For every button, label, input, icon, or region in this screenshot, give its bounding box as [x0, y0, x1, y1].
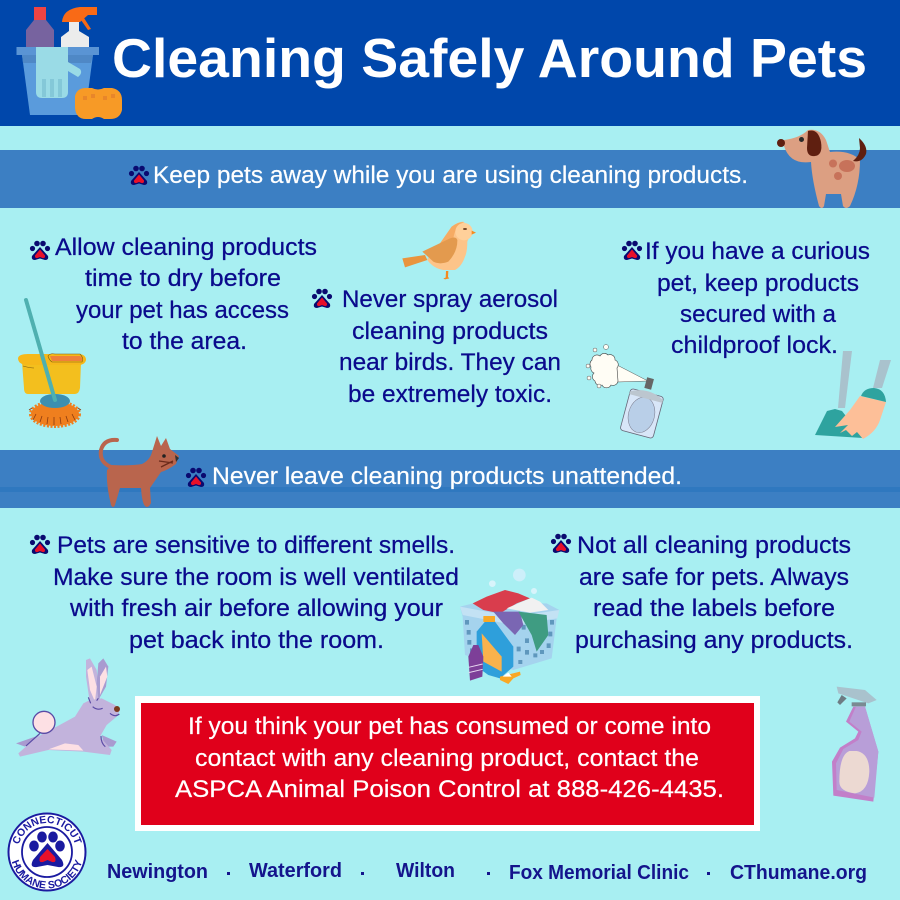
band: never leave unattended — [0, 450, 900, 508]
icon: paw — [551, 534, 571, 553]
text: curious pet: If you have a curious — [645, 238, 870, 265]
footer locations — [107, 860, 867, 884]
footer locations: Waterford — [249, 860, 342, 882]
text: read labels: are safe for pets. Always — [579, 564, 849, 591]
band: keep pets away — [0, 150, 900, 208]
icon: paw — [186, 468, 206, 487]
footer locations: Wilton — [396, 860, 455, 882]
icon: rabbit — [16, 658, 120, 757]
text: smells: Pets are sensitive to different smells. — [57, 532, 455, 559]
header banner — [0, 0, 900, 126]
logo: Connecticut Humane Society — [8, 812, 86, 892]
callout: poison control — [135, 696, 760, 831]
text: aerosol: cleaning products — [352, 318, 548, 345]
icon: bird — [402, 222, 476, 279]
band: never leave unattended: Never leave cleaning products unattended. — [212, 463, 682, 490]
icon: laundry basket — [460, 569, 559, 684]
text: read labels — [575, 532, 853, 654]
text: dry time: time to dry before — [85, 265, 281, 292]
text: smells: pet back into the room. — [129, 627, 384, 654]
icon: paw — [30, 241, 50, 260]
icon: paw — [30, 535, 50, 554]
footer locations: Fox Memorial Clinic — [509, 862, 689, 884]
callout: poison control: contact with any cleaning product, contact the — [195, 745, 699, 772]
callout: poison control: If you think your pet has consumed or come into — [188, 713, 711, 740]
icon: paw — [129, 166, 149, 185]
icon: paw — [312, 289, 332, 308]
text: aerosol — [339, 286, 561, 408]
band: keep pets away: Keep pets away while you are using cleaning products. — [153, 162, 748, 189]
icon: aerosol can spraying — [586, 344, 664, 439]
text: read labels: Not all cleaning products — [577, 532, 851, 559]
icon: broom and dustpan — [815, 351, 891, 439]
text: read labels: purchasing any products. — [575, 627, 853, 654]
footer locations: Newington — [107, 861, 208, 883]
icon: mop and bucket — [18, 300, 86, 426]
text: dry time — [55, 234, 317, 355]
text: curious pet — [645, 238, 870, 359]
text: aerosol: Never spray aerosol — [342, 286, 558, 313]
icon: dog — [777, 130, 866, 208]
text: curious pet: childproof lock. — [671, 332, 838, 359]
title: Cleaning Safely Around Pets — [112, 27, 867, 89]
footer locations: CThumane.org — [730, 862, 867, 884]
text: smells — [53, 532, 459, 654]
callout: poison control: ASPCA Animal Poison Control at 888-426-4435. — [175, 776, 724, 803]
text: aerosol: be extremely toxic. — [348, 381, 552, 408]
text: read labels: read the labels before — [593, 595, 835, 622]
icon: spray bottle — [832, 687, 878, 802]
icon: cat — [101, 436, 179, 507]
text: curious pet: secured with a — [680, 301, 837, 328]
logo: Connecticut Humane Society: CONNECTICUT — [12, 816, 82, 844]
logo: Connecticut Humane Society: HUMANE SOCIETY — [12, 859, 82, 888]
text: smells: with fresh air before allowing your — [69, 595, 443, 622]
text: smells: Make sure the room is well ventilated — [53, 564, 459, 591]
text: aerosol: near birds. They can — [339, 349, 561, 376]
text: dry time: your pet has access — [76, 297, 289, 324]
text: dry time: to the area. — [122, 328, 247, 355]
icon: paw — [622, 241, 642, 260]
icon: cleaning bucket — [16, 7, 122, 119]
text: curious pet: pet, keep products — [657, 270, 859, 297]
text: dry time: Allow cleaning products — [55, 234, 317, 261]
